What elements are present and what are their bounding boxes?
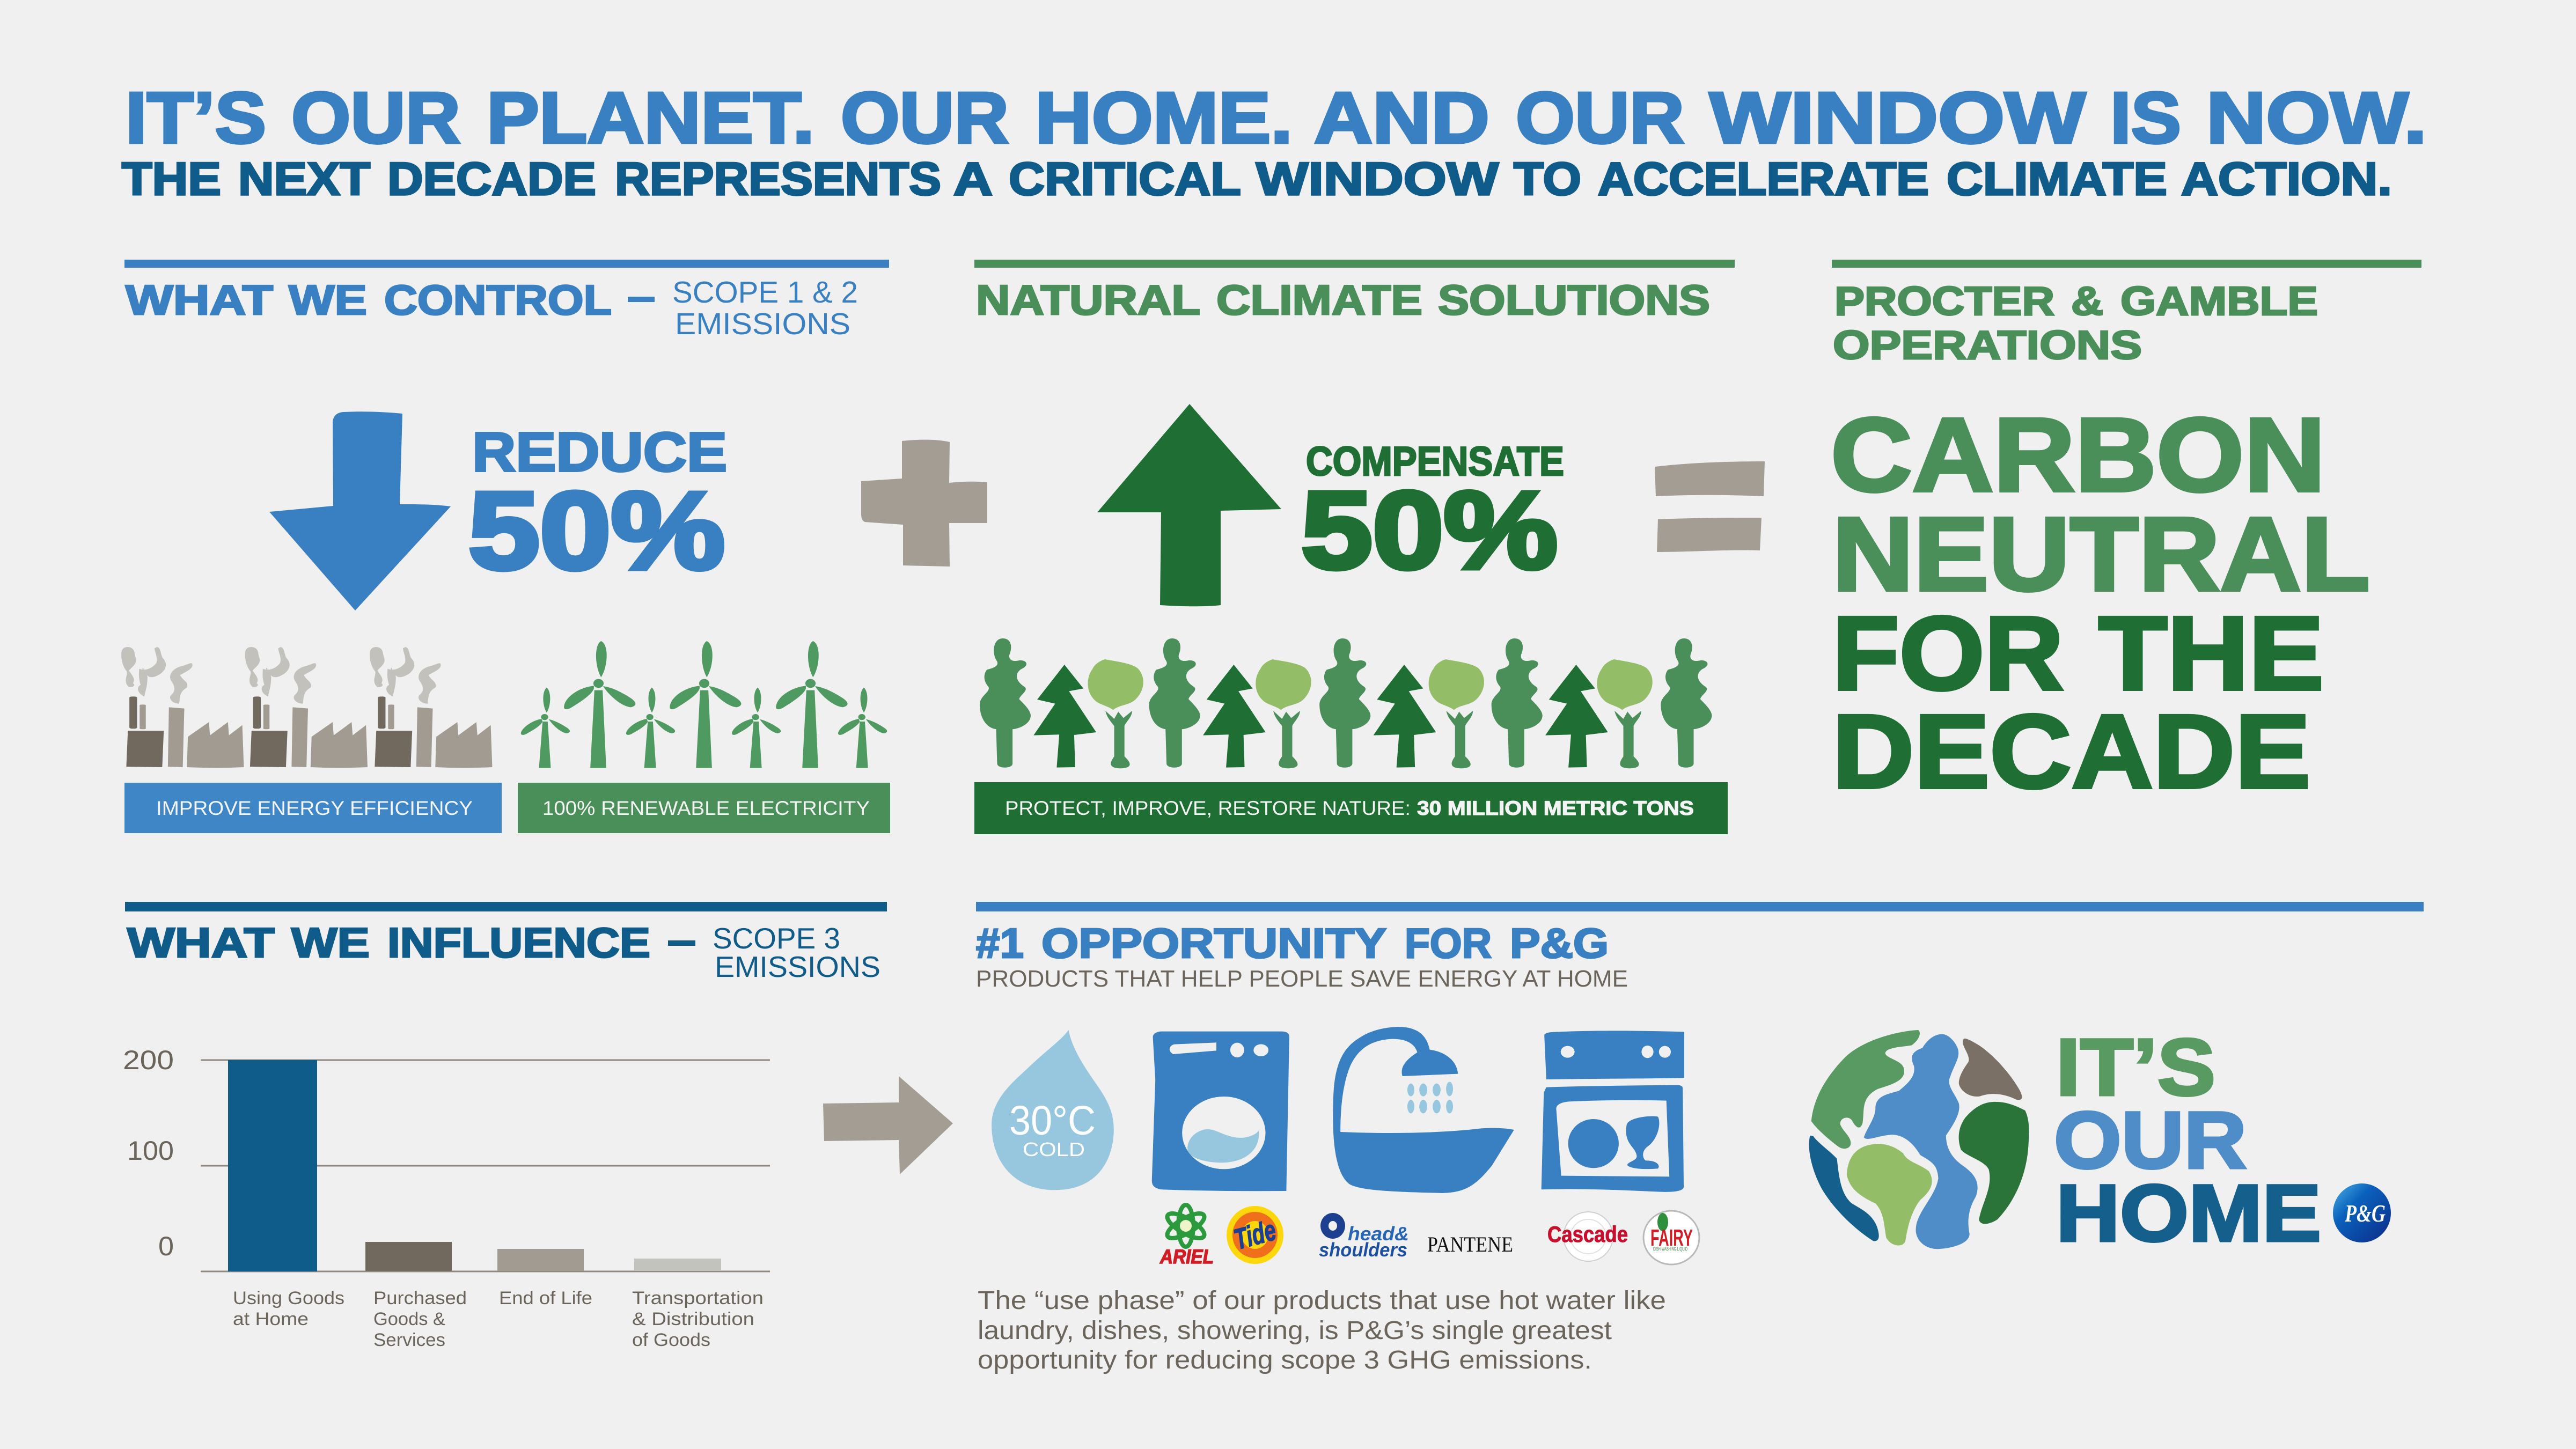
panel: natural climate solutions	[974, 260, 1735, 834]
heading: what we control: CONTROL	[384, 276, 612, 323]
subtitle: CRITICAL	[1009, 153, 1241, 205]
heading: number one opportunity: FOR	[1405, 920, 1492, 967]
heading: procter and gamble operations: GAMBLE	[2120, 278, 2318, 323]
heading: what we influence	[127, 919, 695, 966]
axis labels: 0	[158, 1231, 174, 1261]
bar: end of life	[497, 1249, 584, 1271]
category labels: Goods &	[373, 1309, 445, 1329]
icon: shower and bathtub	[1333, 1027, 1514, 1193]
category labels: Services	[373, 1330, 445, 1350]
heading: what we control: WHAT	[126, 276, 273, 323]
scope 3 label: EMISSIONS	[715, 950, 880, 983]
heading: what we control: WE	[289, 276, 367, 323]
heading: procter and gamble operations	[1833, 278, 2318, 367]
icon: dishwasher	[1542, 1031, 1684, 1192]
body paragraph: The “use phase” of our products that use hot water like	[978, 1286, 1666, 1315]
title: HOME.	[1035, 77, 1293, 158]
callout: improve energy efficiency: IMPROVE ENERGY EFFICIENCY	[156, 797, 473, 819]
icon: water drop: COLD	[1023, 1138, 1085, 1160]
reduce 50 percent: 50%	[468, 469, 725, 592]
category labels	[233, 1288, 764, 1350]
logo: fairy	[1643, 1211, 1699, 1264]
bar: purchased goods and services	[365, 1242, 452, 1271]
title: WINDOW	[1709, 77, 2086, 158]
heading: procter and gamble operations: &	[2071, 278, 2103, 323]
compensate text: COMPENSATE	[1306, 439, 1564, 484]
subtitle: WINDOW	[1256, 153, 1499, 205]
body paragraph: laundry, dishes, showering, is P&G’s single greatest	[978, 1316, 1612, 1345]
body paragraph: opportunity for reducing scope 3 GHG emissions.	[978, 1346, 1592, 1374]
subtitle: THE	[122, 153, 221, 205]
heading: procter and gamble operations: OPERATIONS	[1833, 322, 2142, 367]
title	[126, 77, 2427, 158]
logo: head and shoulders: head&	[1348, 1223, 1409, 1245]
icon: down arrow	[269, 411, 451, 611]
scope 3 label	[713, 922, 880, 983]
subtitle: DECADE	[387, 153, 596, 205]
heading: number one opportunity: P&G	[1510, 920, 1609, 967]
heading: natural climate solutions	[976, 276, 1710, 323]
subtitle: CLIMATE	[1947, 153, 2167, 205]
callout: protect improve restore nature: 30 MILLION METRIC TONS	[1417, 797, 1694, 819]
heading: what we influence: INFLUENCE	[387, 919, 650, 966]
title: OUR	[1516, 77, 1684, 158]
compensate 50 percent: 50%	[1301, 469, 1558, 592]
panel: procter and gamble operations	[1831, 260, 2421, 810]
logo: fairy: FAIRY	[1650, 1225, 1693, 1251]
subtitle: TO	[1514, 153, 1581, 205]
heading: what we control	[126, 276, 655, 323]
heading: what we influence: WHAT	[127, 919, 275, 966]
category labels: at Home	[233, 1309, 309, 1329]
callout: protect improve restore nature	[974, 782, 1728, 834]
logo: p&g badge: P&G	[2344, 1200, 2386, 1227]
logo: tide	[1227, 1206, 1283, 1264]
axis labels: 200	[123, 1045, 174, 1075]
category labels: of Goods	[632, 1330, 710, 1350]
logo: tide: Tide	[1231, 1214, 1279, 1256]
logo: pantene: PANTENE	[1427, 1232, 1513, 1256]
heading: number one opportunity	[976, 920, 1609, 967]
logo: cascade: Cascade	[1547, 1222, 1628, 1247]
icon: gray arrow	[823, 1076, 953, 1174]
title: IT’S	[126, 77, 266, 158]
category labels: End of Life	[499, 1288, 592, 1308]
icon: plus sign	[861, 440, 987, 567]
category labels: Transportation	[632, 1288, 764, 1308]
heading: natural climate solutions: NATURAL	[976, 276, 1200, 323]
heading: number one opportunity: OPPORTUNITY	[1041, 920, 1386, 967]
body paragraph	[978, 1286, 1666, 1374]
logo text: it's our home: IT’S	[2056, 1022, 2215, 1112]
category labels: Purchased	[373, 1288, 467, 1308]
carbon neutral statement: FOR	[1832, 595, 2064, 712]
title: AND	[1314, 77, 1489, 158]
subtitle	[122, 153, 2392, 205]
title: PLANET.	[487, 77, 814, 158]
bar chart	[123, 1045, 770, 1350]
logo: p&g badge	[2333, 1183, 2391, 1242]
logo: head and shoulders	[1319, 1213, 1409, 1261]
icon: factories	[121, 647, 492, 768]
title: OUR	[841, 77, 1009, 158]
bar: transportation and distribution	[634, 1259, 721, 1271]
callout: renewable electricity: 100% RENEWABLE ELECTRICITY	[542, 797, 870, 819]
icon: water drop	[992, 1030, 1114, 1190]
scope 1 and 2 label	[672, 275, 858, 341]
heading: natural climate solutions: SOLUTIONS	[1438, 276, 1710, 323]
logo: head and shoulders: shoulders	[1319, 1239, 1407, 1261]
icon: equals sign	[1655, 461, 1765, 552]
panel: what we control	[121, 260, 890, 833]
category labels: & Distribution	[632, 1309, 754, 1329]
axis labels: 100	[127, 1136, 174, 1166]
logo: cascade	[1547, 1212, 1628, 1261]
subtitle: ACCELERATE	[1598, 153, 1929, 205]
icon: globe	[1809, 1030, 2029, 1249]
logo: fairy: DISH-WASHING LIQUID	[1653, 1246, 1687, 1252]
scope 1 and 2 label: SCOPE 1 & 2	[672, 275, 858, 310]
logo text: it's our home: HOME	[2056, 1168, 2321, 1258]
icon: washing machine	[1152, 1032, 1289, 1191]
heading: number one opportunity: #1	[976, 920, 1024, 967]
logo: ariel: ARIEL	[1159, 1246, 1214, 1268]
title: IS	[2110, 77, 2181, 158]
subtitle: A	[953, 153, 993, 205]
category labels: Using Goods	[233, 1288, 344, 1308]
carbon neutral statement: THE	[2098, 595, 2324, 712]
panel: what we influence	[123, 902, 887, 1350]
title: OUR	[291, 77, 460, 158]
reduce text: REDUCE	[472, 421, 727, 483]
subheading: products: PRODUCTS THAT HELP PEOPLE SAVE ENERGY AT HOME	[976, 966, 1628, 992]
icon: trees	[980, 638, 1712, 768]
callout: protect improve restore nature: PROTECT, IMPROVE, RESTORE NATURE:	[1005, 797, 1411, 819]
callout: renewable electricity	[518, 783, 890, 833]
scope 3 label: SCOPE 3	[713, 922, 840, 955]
heading: procter and gamble operations: PROCTER	[1834, 278, 2054, 323]
logo text: it's our home: OUR	[2054, 1095, 2247, 1185]
subtitle: NEXT	[238, 153, 370, 205]
icon: wind turbines	[521, 641, 887, 768]
icon: water drop: 30°C	[1009, 1098, 1096, 1144]
icon: up arrow	[1097, 404, 1281, 606]
heading: what we influence: WE	[291, 919, 370, 966]
axis labels	[123, 1045, 174, 1261]
callout: improve energy efficiency	[124, 783, 502, 833]
subtitle: ACTION.	[2181, 153, 2392, 205]
subtitle: REPRESENTS	[615, 153, 941, 205]
logo text: it's our home	[2054, 1022, 2321, 1258]
bar: using goods at home	[228, 1060, 317, 1271]
carbon neutral statement: CARBON	[1831, 396, 2325, 513]
logo: ariel	[1159, 1205, 1214, 1268]
carbon neutral statement	[1831, 396, 2370, 810]
heading: natural climate solutions: CLIMATE	[1216, 276, 1422, 323]
carbon neutral statement: NEUTRAL	[1832, 496, 2370, 613]
scope 1 and 2 label: EMISSIONS	[675, 307, 850, 341]
panel: number one opportunity	[976, 902, 2424, 1374]
title: NOW.	[2206, 77, 2427, 158]
carbon neutral statement: DECADE	[1832, 693, 2310, 810]
